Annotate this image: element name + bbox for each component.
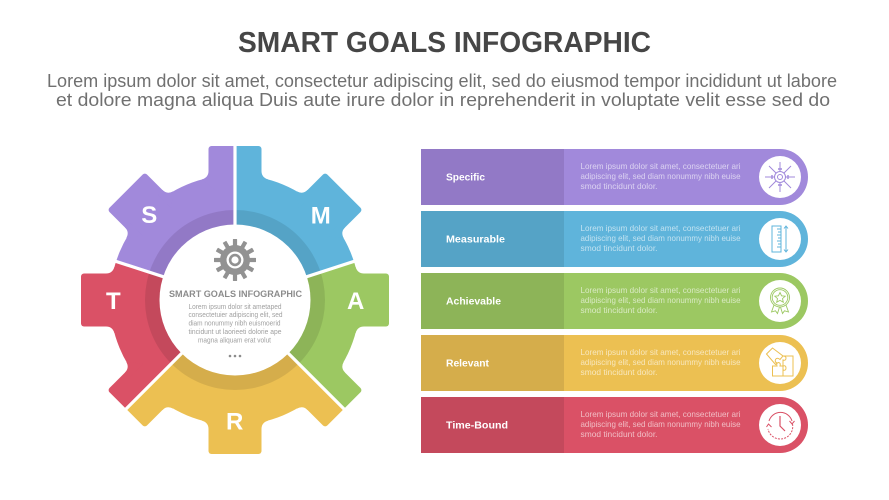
row: Specific: Specific — [446, 172, 485, 184]
center circle — [160, 224, 310, 376]
row: Time-Bound: smod tincidunt dolor. — [580, 429, 658, 439]
row: Time-Bound — [421, 397, 808, 453]
subtitle text: et dolore magna aliqua Duis aute irure dolor in reprehenderit in voluptate velit esse sed do — [56, 90, 830, 110]
row: Relevant: Relevant — [446, 358, 490, 370]
row: Measurable: Measurable — [446, 234, 505, 246]
row: Achievable: smod tincidunt dolor. — [580, 305, 658, 315]
row: Relevant: adipiscing elit, sed diam nonummy nibh euise — [580, 357, 741, 367]
icon: center gear — [214, 239, 256, 281]
center text — [188, 304, 283, 344]
segment: S — [108, 146, 234, 276]
row: Time-Bound: Lorem ipsum dolor sit amet, consectetuer ari — [580, 409, 741, 419]
row: Specific: smod tincidunt dolor. — [580, 181, 658, 191]
letter A: A — [347, 288, 364, 315]
center text: Lorem ipsum dolor sit ametaped — [188, 304, 282, 311]
center text: diam nonummy nibh euismoerid — [188, 320, 281, 327]
row: Specific: adipiscing elit, sed diam nonummy nibh euise — [580, 171, 741, 181]
row: Achievable: adipiscing elit, sed diam nonummy nibh euise — [580, 295, 741, 305]
segment: R — [127, 354, 343, 454]
gear diagram — [81, 140, 389, 454]
letter T: T — [106, 288, 121, 315]
row: Relevant — [421, 335, 808, 391]
icon: ruler — [772, 226, 788, 252]
icon: clock — [766, 412, 794, 439]
row: Measurable: adipiscing elit, sed diam nonummy nibh euise — [580, 233, 741, 243]
row: Achievable: Achievable — [446, 296, 501, 308]
letter R: R — [226, 408, 243, 436]
row: Measurable: smod tincidunt dolor. — [580, 243, 658, 253]
row: Measurable: Lorem ipsum dolor sit amet, consectetuer ari — [580, 223, 741, 233]
row: Specific: Lorem ipsum dolor sit amet, consectetuer ari — [580, 161, 741, 171]
title: SMART GOALS INFOGRAPHIC — [238, 27, 651, 59]
center text: magna aliquam erat volut — [198, 337, 271, 344]
row: Time-Bound: adipiscing elit, sed diam nonummy nibh euise — [580, 419, 741, 429]
subtitle text — [47, 71, 837, 110]
row: Time-Bound: Time-Bound — [446, 420, 508, 432]
row: Measurable — [421, 211, 808, 267]
row: Specific — [421, 149, 808, 205]
segment: A — [290, 263, 389, 408]
center text: consectetuier adipiscing elit, sed — [188, 312, 283, 319]
segment: T — [81, 263, 180, 408]
row: Achievable: Lorem ipsum dolor sit amet, consectetuer ari — [580, 285, 741, 295]
letter S: S — [141, 202, 157, 229]
letter M: M — [311, 202, 331, 229]
center heading: SMART GOALS INFOGRAPHIC — [169, 289, 302, 300]
center text: tincidunt ut laorieeti dolorie ape — [188, 329, 282, 336]
subtitle text: Lorem ipsum dolor sit amet, consectetur adipiscing elit, sed do eiusmod tempor incididunt ut labore — [47, 71, 837, 91]
segment: M — [236, 146, 362, 276]
more dots — [229, 355, 241, 357]
row: Achievable — [421, 273, 808, 329]
icon: medal — [770, 288, 790, 314]
row: Relevant: smod tincidunt dolor. — [580, 367, 658, 377]
icon: sun star — [765, 162, 795, 192]
icon: puzzle — [766, 348, 793, 376]
row: Relevant: Lorem ipsum dolor sit amet, consectetuer ari — [580, 347, 741, 357]
